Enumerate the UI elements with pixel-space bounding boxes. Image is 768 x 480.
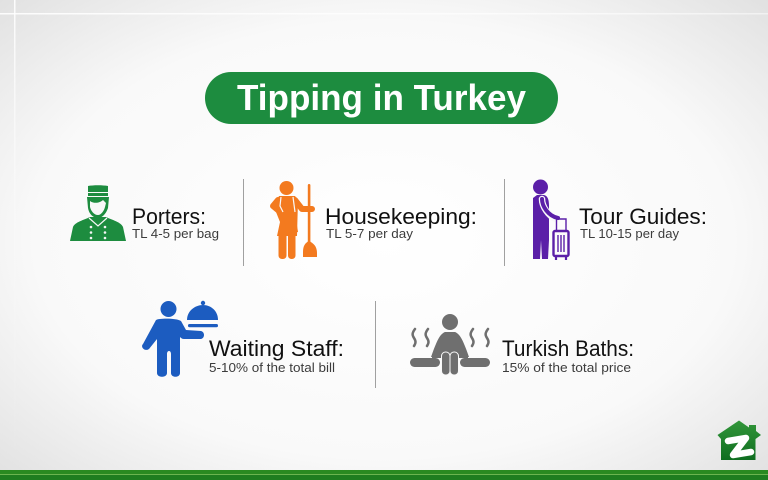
tour guides rate: TL 10-15 per day xyxy=(580,227,680,241)
icon: logo xyxy=(718,420,761,460)
porters heading: Porters: xyxy=(132,204,206,229)
title: Tipping in Turkey xyxy=(237,77,526,118)
icon: steam bath person xyxy=(410,314,490,375)
tour guides heading: Tour Guides: xyxy=(579,204,707,229)
icon: porter xyxy=(70,185,126,241)
housekeeping heading: Housekeeping: xyxy=(325,204,477,229)
icon: housekeeper xyxy=(273,181,317,259)
panel: waiting staff xyxy=(142,301,344,377)
waiting staff heading: Waiting Staff: xyxy=(209,336,344,361)
turkish baths heading: Turkish Baths: xyxy=(502,336,634,361)
panel: porters xyxy=(70,185,219,241)
turkish baths rate: 15% of the total price xyxy=(502,361,631,375)
icon: waiter with cloche xyxy=(142,301,218,377)
icon: tour guide xyxy=(533,180,568,260)
waiting staff rate: 5-10% of the total bill xyxy=(209,361,335,375)
title xyxy=(205,72,558,124)
panel: turkish baths xyxy=(410,314,634,375)
housekeeping rate: TL 5-7 per day xyxy=(326,227,414,241)
panel: housekeeping xyxy=(273,181,477,259)
panel: tour guides xyxy=(533,180,707,260)
footer bar xyxy=(0,470,768,480)
porters rate: TL 4-5 per bag xyxy=(132,227,219,241)
